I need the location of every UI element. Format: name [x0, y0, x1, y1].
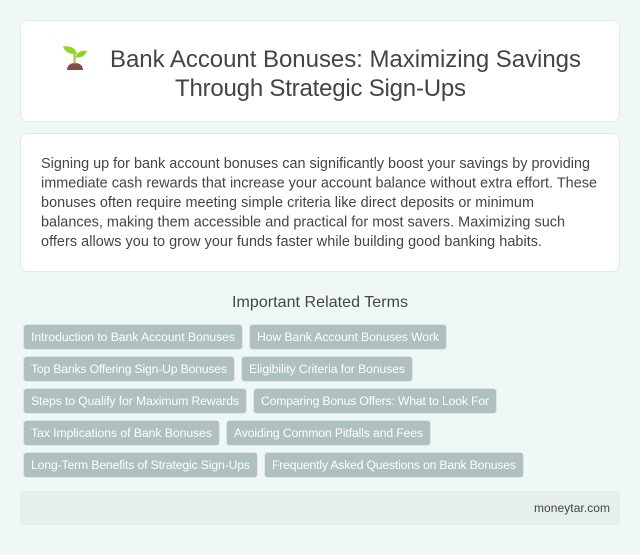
panel: intro paragraph	[20, 134, 620, 272]
tag	[24, 452, 258, 478]
text block: intro: bonuses often require meeting simple criteria like direct deposits or minimum	[41, 195, 534, 211]
tag	[24, 356, 234, 382]
tag	[24, 420, 220, 446]
tag	[24, 324, 242, 350]
tag	[24, 388, 246, 414]
tag	[264, 452, 524, 478]
title: Through Strategic Sign-Ups	[175, 75, 466, 102]
tag: How Bank Account Bonuses Work	[257, 330, 440, 344]
tag	[226, 420, 430, 446]
tag: Tax Implications of Bank Bonuses	[31, 426, 212, 440]
footer bar	[20, 491, 620, 525]
tag	[242, 356, 412, 382]
tag	[250, 324, 446, 350]
tag: Long-Term Benefits of Strategic Sign-Ups	[31, 458, 250, 472]
text block: intro: balances, making them accessible and practical for most savers. Maximizing such	[41, 214, 565, 230]
tag: Comparing Bonus Offers: What to Look For	[261, 394, 489, 408]
tag: Avoiding Common Pitfalls and Fees	[234, 426, 423, 440]
tag: Steps to Qualify for Maximum Rewards	[31, 394, 239, 408]
tag: Frequently Asked Questions on Bank Bonuses	[272, 458, 516, 472]
panel: title card	[20, 20, 620, 122]
tag: Eligibility Criteria for Bonuses	[249, 362, 405, 376]
tag: Introduction to Bank Account Bonuses	[31, 330, 235, 344]
tag	[254, 388, 496, 414]
text block: intro	[41, 156, 597, 250]
title	[110, 46, 581, 102]
title: Bank Account Bonuses: Maximizing Savings	[110, 46, 581, 73]
tag list	[24, 324, 524, 478]
tag: Top Banks Offering Sign-Up Bonuses	[31, 362, 227, 376]
footer text: source: moneytar.com	[534, 501, 610, 515]
text block: intro: Signing up for bank account bonuses can significantly boost your savings by providing	[41, 156, 590, 172]
text block: intro: immediate cash rewards that increase your account balance without extra effort. These	[41, 176, 597, 192]
heading: important related terms: Important Related Terms	[232, 294, 408, 311]
icon: seedling	[63, 46, 87, 70]
text block: intro: offers allows you to grow your funds faster while building good banking habits.	[41, 234, 542, 250]
